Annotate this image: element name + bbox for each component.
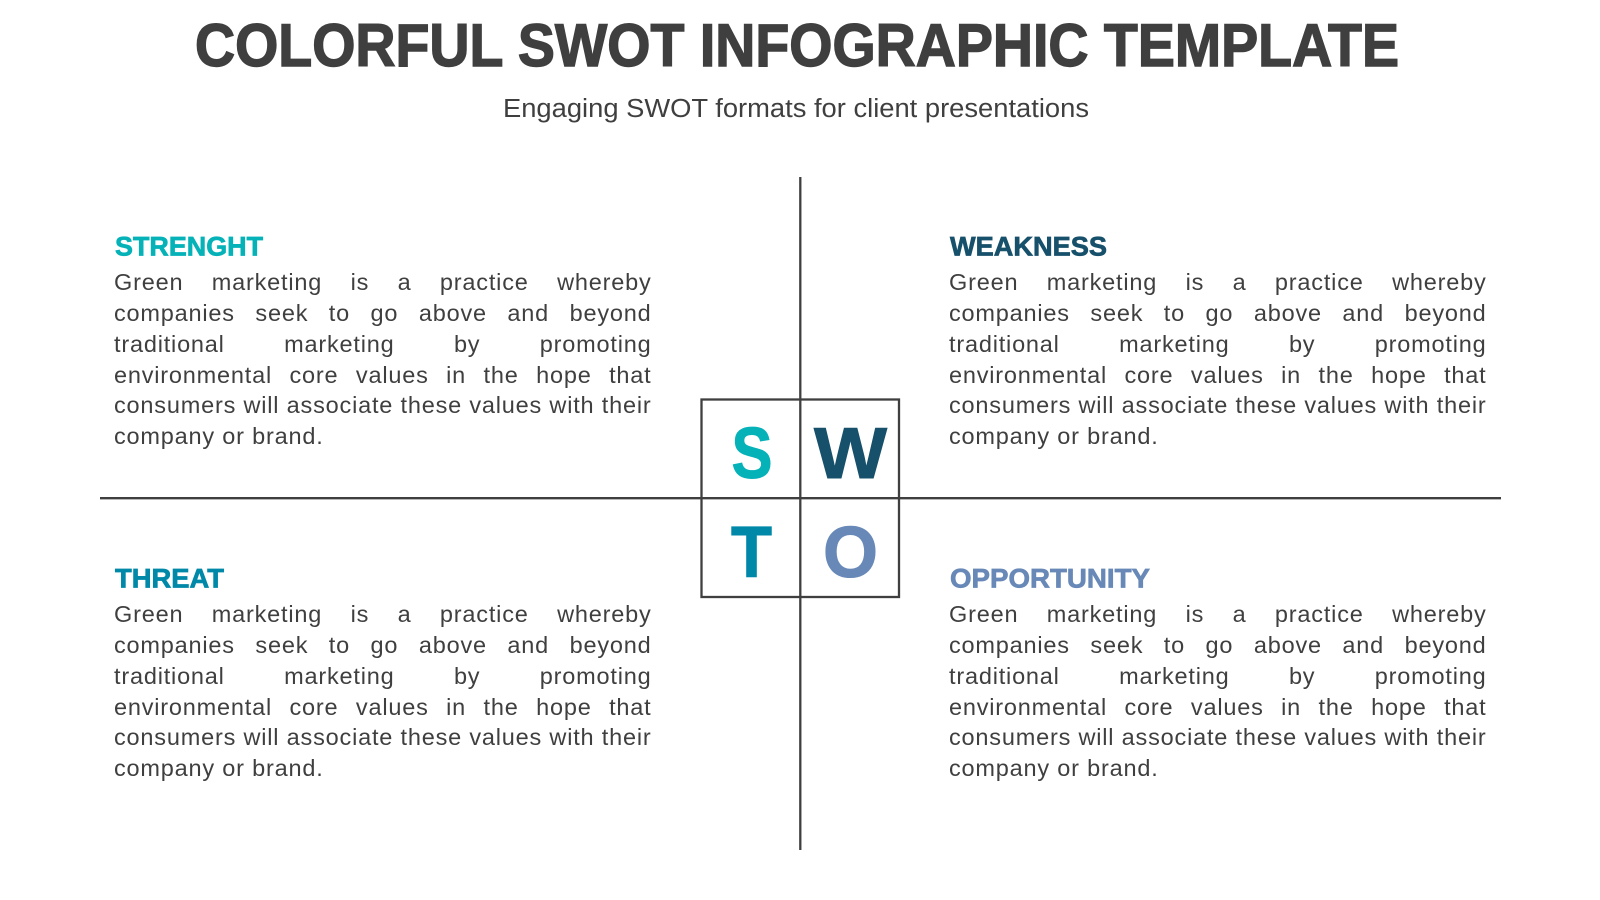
letter S: S <box>732 414 772 494</box>
text block: opportunity: traditional marketing by promoting <box>949 663 1486 689</box>
center SWOT grid box <box>702 400 899 597</box>
text block: threat: companies seek to go above and beyond <box>114 632 652 658</box>
text block: opportunity <box>949 601 1486 781</box>
text block: threat: Green marketing is a practice whereby <box>114 601 652 627</box>
text block: threat: environmental core values in the hope that <box>114 694 652 720</box>
text block: weakness: environmental core values in the hope that <box>949 362 1486 388</box>
heading: opportunity: OPPORTUNITY <box>950 564 1150 594</box>
vertical axis line <box>799 177 801 850</box>
subtitle: Engaging SWOT formats for client presentations <box>503 95 1089 123</box>
letter W: W <box>814 414 887 494</box>
text block: weakness: traditional marketing by promoting <box>949 331 1486 357</box>
letter O: O <box>823 513 878 593</box>
heading: weakness: WEAKNESS <box>950 232 1107 262</box>
text block: threat: company or brand. <box>114 755 324 781</box>
text block: strength: companies seek to go above and beyond <box>114 300 652 326</box>
text block: strength: company or brand. <box>114 423 324 449</box>
text block: threat <box>114 601 652 781</box>
text block: strength: traditional marketing by promoting <box>114 331 652 357</box>
text block: weakness: company or brand. <box>949 423 1159 449</box>
text block: strength: environmental core values in the hope that <box>114 362 652 388</box>
text block: weakness: consumers will associate these values with their <box>949 392 1486 418</box>
text block: weakness: companies seek to go above and beyond <box>949 300 1486 326</box>
text block: opportunity: company or brand. <box>949 755 1159 781</box>
text block: opportunity: consumers will associate these values with their <box>949 724 1486 750</box>
grid vertical divider <box>799 400 801 597</box>
horizontal axis line <box>100 497 1501 499</box>
heading: threat: THREAT <box>115 564 225 594</box>
text block: threat: consumers will associate these values with their <box>114 724 652 750</box>
text block: opportunity: Green marketing is a practice whereby <box>949 601 1486 627</box>
heading: strength: STRENGHT <box>115 232 264 262</box>
text block: threat: traditional marketing by promoting <box>114 663 652 689</box>
text block: strength: consumers will associate these values with their <box>114 392 652 418</box>
text block: opportunity: companies seek to go above and beyond <box>949 632 1486 658</box>
text block: strength <box>114 269 652 449</box>
text block: weakness <box>949 269 1486 449</box>
title: COLORFUL SWOT INFOGRAPHIC TEMPLATE <box>195 12 1399 79</box>
letter T: T <box>731 513 772 593</box>
text block: strength: Green marketing is a practice whereby <box>114 269 652 295</box>
grid horizontal divider <box>702 497 899 499</box>
text block: weakness: Green marketing is a practice whereby <box>949 269 1486 295</box>
text block: opportunity: environmental core values in the hope that <box>949 694 1486 720</box>
